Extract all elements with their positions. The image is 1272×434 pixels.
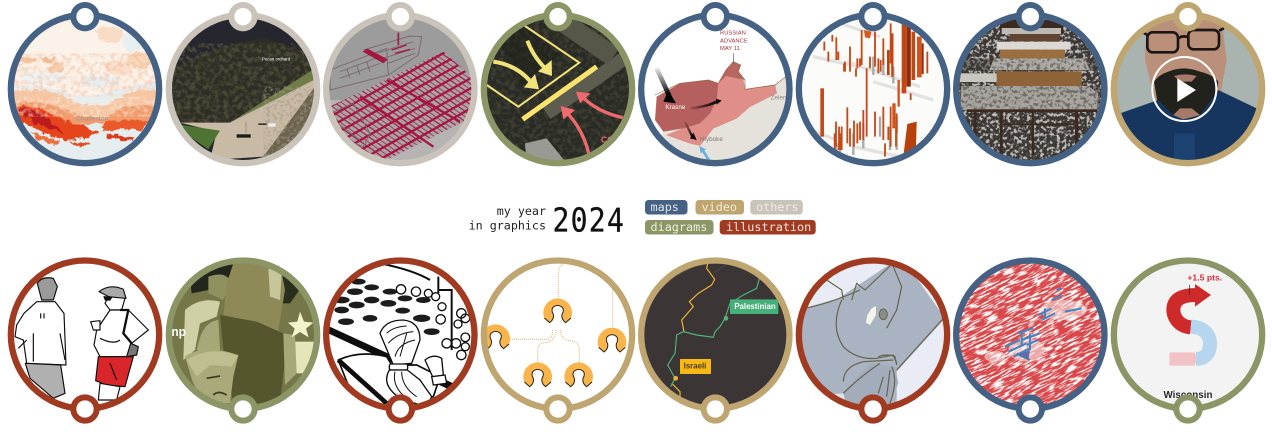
label: Charleston: Charleston (76, 115, 108, 122)
green route (668, 278, 759, 387)
pale gaps (984, 300, 1087, 362)
label: Palestinian (730, 299, 778, 314)
play button (1152, 57, 1216, 121)
panel: illustration of crowd seen from behind (323, 260, 480, 421)
title: 2024: 2024 (552, 202, 625, 240)
yellow route (672, 260, 715, 398)
label: Israeli: Israeli (684, 362, 706, 371)
legend chip: illustration: illustration (726, 220, 811, 234)
legend chip: diagrams: diagrams (650, 220, 707, 234)
left man (37, 278, 57, 300)
panel: duotone photo of Trump and woman (167, 260, 320, 421)
map labels: ADVANCE (720, 38, 748, 44)
legend (645, 200, 816, 234)
advance arrows (657, 68, 669, 96)
map labels (665, 31, 787, 143)
panel: cargo ship wireframe diagram (323, 5, 480, 163)
panel: illustration of two men (10, 260, 160, 421)
panel: aerial photo of pecan orchard (167, 5, 320, 163)
legend chip: maps (645, 200, 688, 214)
red arrows (566, 97, 623, 153)
red arrow (1173, 295, 1196, 327)
person icons (543, 298, 572, 323)
yellow arrows (493, 41, 545, 82)
title block (469, 202, 625, 240)
audience hats (334, 278, 440, 335)
thin spikes (824, 23, 927, 157)
panel: network diagram of people (481, 260, 633, 421)
legend chip: others: others (756, 200, 799, 214)
right man (99, 287, 126, 300)
yellow wall bar (523, 67, 597, 119)
map labels: Zelen (771, 95, 787, 102)
label: +1.5 pts.: +1.5 pts. (1187, 272, 1222, 282)
glasses (1143, 28, 1224, 52)
legend chip: maps: maps (650, 200, 679, 214)
panel: illustration of wounded body with cord (797, 260, 950, 421)
map labels: Krasne (665, 104, 686, 111)
tall cluster (888, 24, 923, 128)
map labels: RUSSIAN (720, 31, 746, 37)
label: Wisconsin: Wisconsin (1163, 390, 1213, 401)
label: Palestinian: Palestinian (734, 302, 776, 311)
panel: 3D spike map (797, 5, 950, 163)
panel: red and blue wind map (953, 257, 1108, 424)
title: my year in graphics (469, 204, 546, 232)
legend chip: video: video (702, 200, 737, 214)
panel: annotated aerial diagram with arrows (483, 5, 633, 163)
map labels: Hlyboke (700, 136, 723, 143)
label: Israeli (680, 359, 711, 374)
panel: video thumbnail of presenter (1113, 5, 1263, 163)
panel: Wisconsin swing diagram (1113, 260, 1263, 421)
panel: photo of rubble-covered school desks (953, 5, 1110, 163)
panel: map of Russian advance (640, 5, 793, 163)
label: cropped text: np (171, 324, 186, 339)
dotted connectors (510, 264, 613, 365)
pink origin arrow (1169, 352, 1198, 366)
title: my year in graphics: in graphics (469, 218, 546, 232)
yellow outlined zone (483, 26, 579, 107)
title: my year in graphics: my year (497, 204, 546, 218)
panel: heat map of Charleston (10, 5, 160, 163)
panel: annotated aerial diagram with arrows: CO (601, 134, 614, 144)
label: Pecan orchard: Pecan orchard (262, 57, 291, 62)
map labels: MAY 11 (720, 46, 740, 52)
panel: dark map with route lines (640, 260, 790, 421)
blue arc (1191, 327, 1210, 359)
blue patches (1005, 288, 1082, 360)
foreground woman (337, 353, 438, 398)
